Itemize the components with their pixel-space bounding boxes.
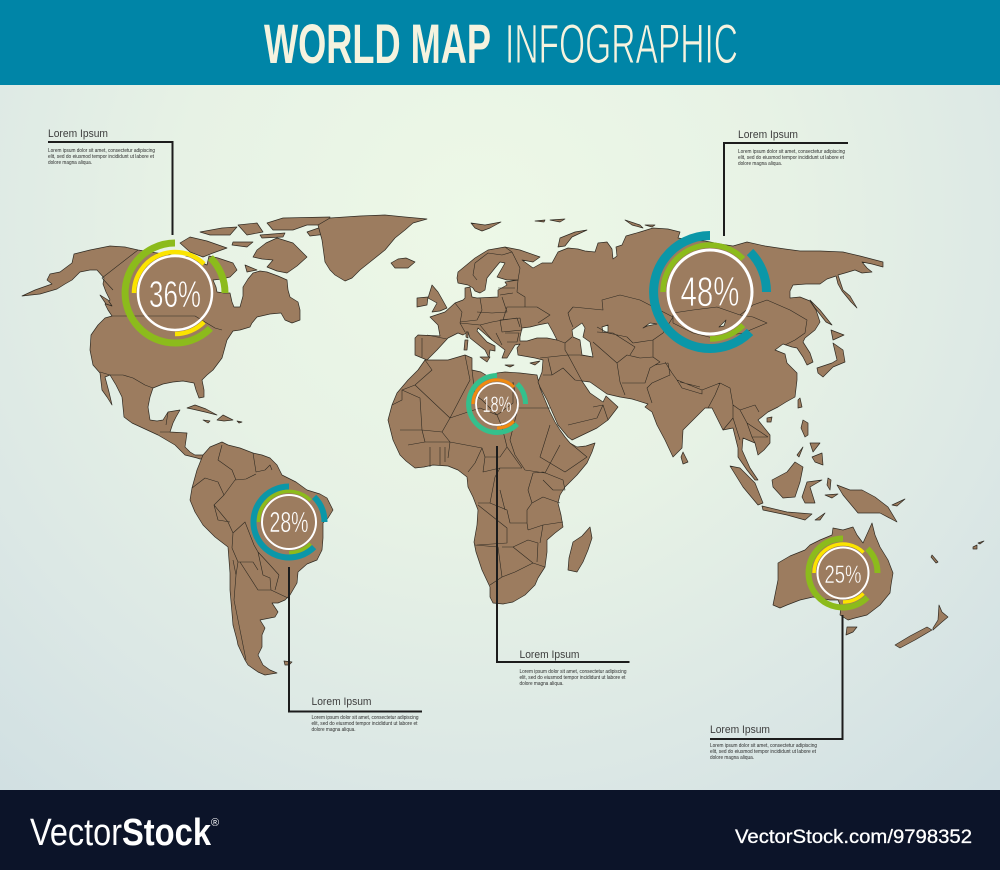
indonesia and new guinea bbox=[730, 462, 905, 522]
footer logo: Stock bbox=[122, 812, 212, 854]
falkland islands bbox=[284, 661, 292, 665]
callout body: elit, sed do eiusmod tempor incididunt ut labore et bbox=[710, 749, 817, 755]
leader line bbox=[289, 567, 422, 712]
footer image id: VectorStock.com/9798352 bbox=[735, 827, 972, 848]
callout: australia bbox=[710, 615, 842, 761]
donut gauge: 18% bbox=[469, 376, 526, 432]
iceland bbox=[391, 258, 415, 268]
donut gauge: 28% bbox=[253, 486, 324, 558]
donut gauge: 28%: 28% bbox=[270, 507, 308, 539]
callout body: Lorem ipsum dolor sit amet, consectetur adipiscing bbox=[710, 743, 817, 749]
callout: north america bbox=[48, 128, 172, 235]
east asian islands bbox=[681, 300, 845, 465]
australia bbox=[773, 523, 893, 620]
callout body: elit, sed do eiusmod tempor incididunt ut labore et bbox=[738, 155, 845, 161]
callout body: dolore magna aliqua. bbox=[710, 755, 754, 761]
callout heading: Lorem Ipsum bbox=[48, 128, 108, 140]
donut gauge: 36% bbox=[125, 243, 225, 343]
callout: south america bbox=[289, 567, 422, 733]
donut gauge: 18%: 18% bbox=[482, 392, 512, 417]
caribbean islands bbox=[187, 405, 242, 423]
callout: africa bbox=[497, 446, 630, 687]
leader line bbox=[48, 142, 172, 235]
leader line bbox=[497, 446, 630, 662]
madagascar bbox=[568, 527, 592, 572]
british isles bbox=[417, 285, 447, 312]
callout body: Lorem ipsum dolor sit amet, consectetur adipiscing bbox=[48, 148, 155, 154]
leader line bbox=[724, 143, 848, 236]
callout heading: Lorem Ipsum bbox=[738, 129, 798, 141]
world map bbox=[22, 215, 984, 675]
footer logo: ® bbox=[211, 817, 219, 829]
title: WORLD MAP bbox=[264, 12, 491, 75]
callout body: Lorem ipsum dolor sit amet, consectetur adipiscing bbox=[312, 715, 419, 721]
tasmania bbox=[846, 627, 857, 635]
africa borders bbox=[392, 355, 587, 585]
footer logo bbox=[30, 812, 219, 854]
callout body: elit, sed do eiusmod tempor incididunt ut labore et bbox=[48, 154, 155, 160]
callout heading: Lorem Ipsum bbox=[710, 724, 770, 736]
arctic islands bbox=[100, 217, 330, 306]
callout heading: Lorem Ipsum bbox=[312, 696, 372, 708]
callout body: dolore magna aliqua. bbox=[520, 681, 564, 687]
callout body: Lorem ipsum dolor sit amet, consectetur adipiscing bbox=[738, 149, 845, 155]
africa bbox=[388, 355, 595, 604]
footer band bbox=[0, 790, 1000, 870]
callout body: elit, sed do eiusmod tempor incididunt ut labore et bbox=[312, 721, 418, 727]
title: INFOGRAPHIC bbox=[505, 12, 738, 75]
callout body: elit, sed do eiusmod tempor incididunt ut labore et bbox=[520, 675, 626, 681]
europe borders bbox=[422, 247, 550, 357]
callout body: Lorem ipsum dolor sit amet, consectetur adipiscing bbox=[520, 669, 627, 675]
eurasia bbox=[415, 228, 883, 480]
leader line bbox=[710, 615, 842, 739]
south america borders bbox=[192, 445, 288, 660]
callout body: dolore magna aliqua. bbox=[738, 161, 782, 167]
header band bbox=[0, 0, 1000, 85]
callout: russia bbox=[724, 129, 848, 236]
donut gauge: 36%: 36% bbox=[149, 274, 201, 315]
donut gauge: 48%: 48% bbox=[680, 268, 740, 315]
callout heading: Lorem Ipsum bbox=[520, 649, 580, 661]
new zealand and pacific islands bbox=[895, 541, 984, 648]
donut gauge: 25% bbox=[809, 538, 878, 607]
north america bbox=[22, 246, 300, 459]
mediterranean islands bbox=[464, 332, 540, 367]
callout body: dolore magna aliqua. bbox=[312, 727, 356, 733]
callout body: dolore magna aliqua. bbox=[48, 160, 92, 166]
asia borders bbox=[540, 295, 807, 443]
footer logo: Vector bbox=[30, 812, 122, 854]
donut gauge: 48% bbox=[654, 236, 767, 348]
arctic eurasian islands bbox=[471, 219, 655, 247]
donut gauge: 25%: 25% bbox=[824, 561, 862, 589]
greenland bbox=[318, 215, 427, 281]
south america bbox=[190, 442, 333, 675]
north america borders bbox=[100, 250, 222, 432]
